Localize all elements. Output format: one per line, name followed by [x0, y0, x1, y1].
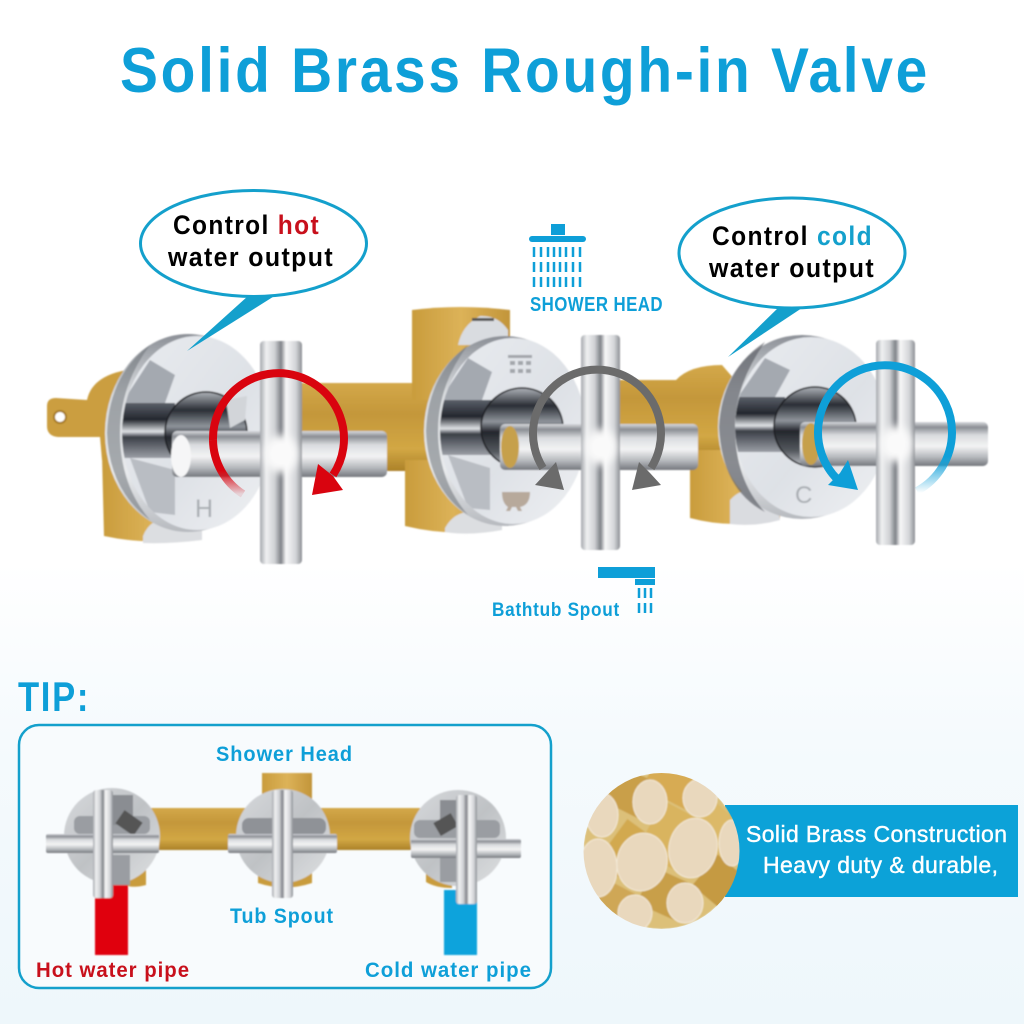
diagram: valve from the front: [46, 773, 521, 955]
right cold valve: [718, 335, 988, 545]
icon: plate bathtub symbol: [502, 492, 530, 511]
callout text: water output: [167, 242, 334, 272]
right small valve: [410, 790, 521, 904]
hot water pipe: [95, 885, 128, 955]
left hot valve: [105, 334, 387, 564]
callout text: water output: [708, 253, 875, 283]
icon: plate shower symbol: [508, 355, 532, 373]
cold water pipe: [444, 890, 477, 955]
banner: solid brass construction: [725, 805, 1018, 897]
heading: tip: TIP:: [18, 673, 90, 720]
handle: [800, 340, 988, 545]
arrow: cold rotation: [818, 365, 952, 491]
label: shower head outlet: Shower Head: [216, 743, 353, 766]
label: cold water pipe: Cold water pipe: [365, 959, 532, 982]
banner text: Solid Brass Construction: [746, 821, 1007, 847]
hot plate letter: H: [195, 495, 213, 523]
cold plate letter: C: [795, 482, 812, 509]
label: tub spout: Tub Spout: [230, 905, 334, 928]
image: brass rods: [579, 772, 745, 931]
handle: [171, 341, 387, 564]
arrow: hot rotation: [213, 373, 344, 495]
handle: [500, 335, 698, 550]
product photo: rough-in valve: [47, 307, 988, 564]
callout: cold: [679, 198, 905, 357]
arrow: diverter rotation: [533, 370, 661, 490]
banner text: Heavy duty & durable,: [763, 852, 998, 878]
callout text: Control cold: [712, 221, 879, 251]
label: hot water pipe: Hot water pipe: [36, 959, 190, 982]
callout text: Control hot: [173, 210, 324, 240]
label: shower head: SHOWER HEAD: [530, 294, 663, 316]
panel: installation tip: [19, 725, 551, 988]
icon: bathtub spout: [598, 567, 655, 615]
center small valve: [228, 789, 337, 898]
icon: shower head: [529, 224, 586, 287]
center diverter valve: [424, 335, 698, 550]
callout: hot: [140, 190, 366, 351]
label: bathtub spout: Bathtub Spout: [492, 600, 620, 621]
left small valve: [46, 788, 160, 898]
brass body: [47, 307, 780, 543]
title: Solid Brass Rough-in Valve: [120, 36, 930, 106]
